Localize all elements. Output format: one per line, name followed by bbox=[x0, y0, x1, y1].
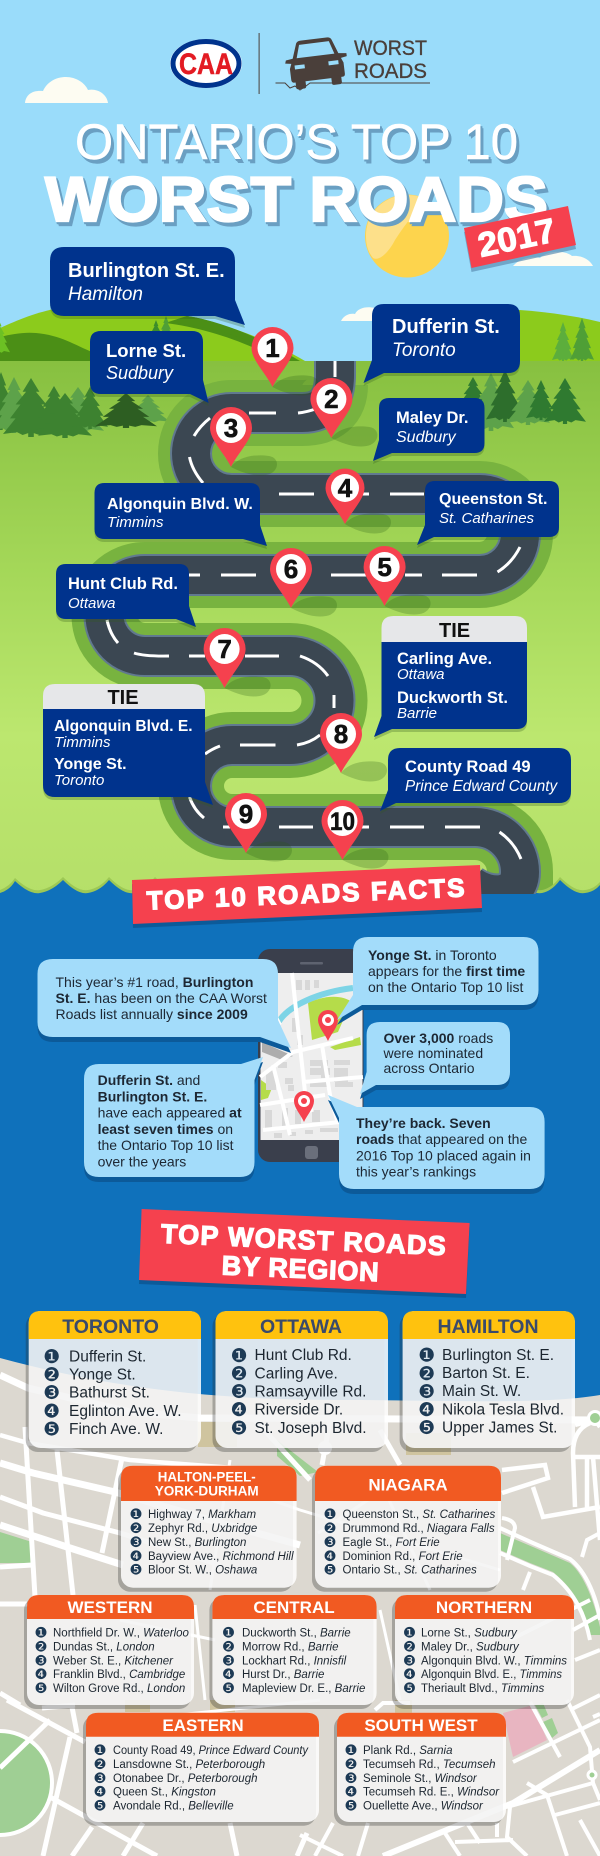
panel: Western bbox=[24, 1595, 194, 1709]
list: Halton-Peel-York-Durham roads: ❸ bbox=[130, 1535, 142, 1551]
list: Western roads bbox=[34, 1625, 190, 1697]
list: South West roads bbox=[344, 1743, 500, 1815]
list: Central roads bbox=[222, 1625, 365, 1697]
fact bubble: number one road bbox=[38, 959, 291, 1048]
list: Halton-Peel-York-Durham roads: Highway 7, Markham bbox=[148, 1509, 256, 1521]
logo: CAA: CAA bbox=[179, 48, 233, 81]
list: Ottawa roads: Ramsayville Rd. bbox=[254, 1384, 366, 1400]
list: Northern roads: ❹ bbox=[403, 1667, 416, 1683]
pin 6 with shadow: 6 bbox=[284, 554, 298, 584]
list: Halton-Peel-York-Durham roads: Zephyr Rd., Uxbridge bbox=[148, 1523, 257, 1535]
panel header: Hamilton: HAMILTON bbox=[437, 1316, 539, 1338]
list: Ottawa roads: Hunt Club Rd. bbox=[254, 1347, 352, 1364]
banner: top 10 roads facts: TOP 10 ROADS FACTS bbox=[146, 872, 465, 916]
panel: Hamilton bbox=[400, 1311, 575, 1452]
pin 2 with shadow: 2 bbox=[324, 384, 339, 414]
bubble: tie Algonquin Blvd. E. and Yonge St.: Algonquin Blvd. E. bbox=[54, 718, 193, 735]
panel header: South West bbox=[337, 1713, 506, 1737]
bubble: tie Carling Ave. and Duckworth St.: Ottawa bbox=[397, 666, 445, 683]
logo: Worst Roads car: WORST bbox=[354, 36, 427, 60]
list: Western roads: ❸ bbox=[34, 1653, 48, 1669]
pin 5 with shadow bbox=[364, 546, 431, 614]
pin 1 with shadow bbox=[252, 327, 318, 395]
list: Hamilton roads: ❹ bbox=[418, 1399, 435, 1421]
bubble: Queenston St.: St. Catharines bbox=[439, 510, 535, 527]
bubble: Maley Dr. bbox=[373, 398, 484, 461]
bubble: tie Algonquin Blvd. E. and Yonge St.: Yonge St. bbox=[54, 756, 127, 773]
bubble: Maley Dr.: Maley Dr. bbox=[396, 409, 468, 427]
bubble: tie Carling Ave. and Duckworth St.: Barrie bbox=[397, 705, 437, 722]
list: South West roads: Tecumseh Rd. E., Windsor bbox=[363, 1787, 500, 1799]
list: Niagara roads: Queenston St., St. Catharines bbox=[342, 1509, 496, 1521]
list: Niagara roads bbox=[324, 1507, 496, 1579]
list: South West roads: ❷ bbox=[344, 1757, 358, 1773]
bubble: County Road 49: Prince Edward County bbox=[405, 778, 559, 795]
pin 5 with shadow: 5 bbox=[377, 552, 392, 582]
pin 3 with shadow: 3 bbox=[224, 413, 238, 443]
fact bubble: over 3,000 roads: were nominated bbox=[382, 1045, 483, 1061]
list: Ottawa roads: Carling Ave. bbox=[254, 1365, 338, 1382]
fact bubble: they're back: roads that appeared on the bbox=[356, 1131, 527, 1147]
road bbox=[104, 361, 520, 894]
panel header: Niagara bbox=[315, 1466, 501, 1501]
panel: South West bbox=[334, 1713, 506, 1826]
bubble: Algonquin Blvd. W.: Algonquin Blvd. W. bbox=[107, 496, 253, 513]
list: Hamilton roads: Barton St. E. bbox=[442, 1365, 530, 1382]
list: Western roads: ❺ bbox=[34, 1681, 48, 1697]
list: Toronto roads: Dufferin St. bbox=[69, 1348, 146, 1366]
fact bubble: Dufferin and Burlington: Burlington St. E. bbox=[98, 1089, 207, 1105]
pin 9 with shadow bbox=[225, 793, 292, 861]
list: Toronto roads: ❹ bbox=[43, 1400, 60, 1422]
sun bbox=[365, 194, 449, 278]
list: Ottawa roads: ❸ bbox=[230, 1381, 248, 1403]
list: Eastern roads: ❹ bbox=[94, 1785, 106, 1801]
list: Northern roads: Maley Dr., Sudbury bbox=[421, 1641, 520, 1653]
panel header: Western bbox=[27, 1595, 194, 1619]
panel header: Central bbox=[212, 1595, 377, 1619]
fact bubble: Yonge St. bbox=[337, 937, 538, 1020]
list: Northern roads: ❸ bbox=[403, 1653, 416, 1669]
bubble: Algonquin Blvd. W.: Timmins bbox=[107, 514, 164, 531]
panel header: Ottawa: OTTAWA bbox=[260, 1316, 342, 1338]
list: Ottawa roads: ❺ bbox=[230, 1418, 248, 1440]
list: South West roads: ❶ bbox=[344, 1743, 358, 1759]
list: Western roads: ❷ bbox=[34, 1639, 48, 1655]
distant trees bbox=[0, 316, 594, 362]
list: Eastern roads: ❺ bbox=[94, 1799, 106, 1815]
phone map pin lower bbox=[294, 1091, 314, 1122]
list: Toronto roads: Finch Ave. W. bbox=[69, 1421, 163, 1438]
fact bubble: they're back bbox=[328, 1095, 545, 1189]
list: South West roads: ❸ bbox=[344, 1771, 358, 1787]
list: Central roads: Mapleview Dr. E., Barrie bbox=[242, 1683, 365, 1695]
list: Hamilton roads: Burlington St. E. bbox=[442, 1347, 554, 1364]
list: Northern roads: Lorne St., Sudbury bbox=[421, 1627, 518, 1639]
cloud: upper left bbox=[25, 77, 108, 103]
trees: left cluster bbox=[0, 372, 170, 438]
bubble: County Road 49 bbox=[380, 748, 571, 811]
fact bubble: Yonge St.: appears for the first time bbox=[368, 963, 525, 979]
bubble: Lorne St.: Lorne St. bbox=[106, 340, 186, 361]
pin 9 with shadow: 9 bbox=[239, 799, 253, 829]
fact bubble: over 3,000 roads: Over 3,000 roads bbox=[384, 1030, 493, 1046]
bubble: tie Algonquin Blvd. E. and Yonge St.: Toronto bbox=[54, 772, 104, 789]
list: Hamilton roads: Nikola Tesla Blvd. bbox=[442, 1401, 564, 1418]
list: Niagara roads: ❺ bbox=[324, 1563, 336, 1579]
bubble: Lorne St. bbox=[90, 331, 209, 403]
green field bbox=[0, 361, 600, 896]
list: Niagara roads: Drummond Rd., Niagara Falls bbox=[342, 1523, 495, 1535]
panel header: Ottawa bbox=[216, 1311, 388, 1339]
list: Halton-Peel-York-Durham roads: ❺ bbox=[130, 1563, 142, 1579]
list: Eastern roads: Otonabee Dr., Peterborough bbox=[113, 1773, 258, 1785]
list: Central roads: ❹ bbox=[222, 1667, 235, 1683]
bubble: Queenston St.: Queenston St. bbox=[439, 491, 547, 508]
fact bubble: Dufferin and Burlington: the Ontario Top 10 list bbox=[98, 1137, 234, 1153]
title: ONTARIO’S TOP 10 bbox=[75, 114, 518, 170]
panel header: Hamilton bbox=[403, 1311, 575, 1339]
list: Eastern roads: Avondale Rd., Belleville bbox=[113, 1801, 234, 1813]
list: Central roads: ❶ bbox=[222, 1625, 235, 1641]
bubble: tie Carling Ave. and Duckworth St.: Duckworth St. bbox=[397, 689, 508, 707]
panel header: Northern: NORTHERN bbox=[436, 1598, 532, 1617]
pin 3 with shadow bbox=[210, 407, 277, 475]
list: Northern roads: Algonquin Blvd. E., Timmins bbox=[421, 1669, 562, 1681]
title bbox=[45, 114, 548, 235]
list: Ottawa roads: St. Joseph Blvd. bbox=[254, 1420, 367, 1437]
phone map pin upper bbox=[318, 1010, 338, 1041]
road shoulder bbox=[104, 385, 520, 895]
list: Hamilton roads bbox=[418, 1344, 564, 1439]
bubble: Burlington St. E.: Hamilton bbox=[68, 284, 143, 305]
panel header: South West: SOUTH WEST bbox=[364, 1716, 478, 1735]
logo: CAA bbox=[170, 39, 242, 88]
list: Hamilton roads: ❺ bbox=[418, 1417, 435, 1439]
fact bubble: over 3,000 roads bbox=[360, 1022, 510, 1094]
fact bubble: Yonge St.: Yonge St. in Toronto bbox=[368, 947, 497, 963]
banner: top 10 roads facts bbox=[132, 865, 482, 928]
list: Eastern roads bbox=[94, 1743, 309, 1815]
pin 2 with shadow bbox=[310, 378, 377, 446]
list: Western roads: Weber St. E., Kitchener bbox=[53, 1655, 174, 1667]
fact bubble: number one road: Roads list annually since 2009 bbox=[56, 1006, 248, 1022]
fact bubble: they're back: 2016 Top 10 placed again in bbox=[356, 1148, 531, 1164]
fact bubble: Dufferin and Burlington bbox=[84, 1057, 263, 1177]
panel header: Niagara: NIAGARA bbox=[368, 1476, 448, 1495]
list: Toronto roads: ❺ bbox=[43, 1418, 60, 1440]
panel: Eastern bbox=[83, 1713, 319, 1826]
cloud: small bbox=[341, 307, 375, 321]
list: Eastern roads: ❷ bbox=[94, 1757, 106, 1773]
fact bubble: number one road: St. E. has been on the CAA Worst bbox=[56, 990, 267, 1006]
bubble: tie Carling Ave. and Duckworth St. bbox=[374, 616, 527, 737]
list: Western roads: Northfield Dr. W., Waterloo bbox=[53, 1627, 190, 1639]
list: Toronto roads: Eglinton Ave. W. bbox=[69, 1403, 182, 1420]
list: Ottawa roads: ❷ bbox=[230, 1363, 248, 1385]
hills bbox=[0, 306, 600, 361]
city map background bbox=[0, 1358, 600, 1856]
bubble: Maley Dr.: Sudbury bbox=[396, 429, 457, 446]
list: Northern roads: ❺ bbox=[403, 1681, 416, 1697]
panel header: Western: WESTERN bbox=[68, 1598, 152, 1617]
panel header: Halton-Peel-York-Durham: HALTON-PEEL- bbox=[158, 1469, 256, 1485]
logo divider bbox=[259, 33, 260, 94]
pin 4 with shadow bbox=[326, 468, 391, 533]
water bbox=[0, 877, 600, 1420]
list: South West roads: Plank Rd., Sarnia bbox=[363, 1745, 452, 1757]
bubble: tie Algonquin Blvd. E. and Yonge St. bbox=[43, 684, 213, 805]
list: Hamilton roads: ❷ bbox=[418, 1363, 435, 1385]
list: Ottawa roads: ❶ bbox=[230, 1345, 248, 1367]
road center dashes bbox=[107, 361, 521, 859]
list: Western roads: ❹ bbox=[34, 1667, 48, 1683]
list: South West roads: Tecumseh Rd., Tecumseh bbox=[363, 1759, 496, 1771]
list: Eastern roads: County Road 49, Prince Edward County bbox=[113, 1745, 309, 1757]
list: Halton-Peel-York-Durham roads: Bloor St. W., Oshawa bbox=[148, 1565, 257, 1577]
pin 10 with shadow bbox=[322, 800, 388, 868]
bubble: Hunt Club Rd.: Ottawa bbox=[68, 595, 116, 612]
list: Ottawa roads: ❹ bbox=[230, 1399, 248, 1421]
bubble: County Road 49: County Road 49 bbox=[405, 758, 531, 776]
fact bubble: Dufferin and Burlington: over the years bbox=[98, 1154, 186, 1170]
list: Western roads: Dundas St., London bbox=[53, 1641, 155, 1653]
panel: Central bbox=[209, 1595, 377, 1709]
bubble: tie Carling Ave. and Duckworth St.: Carling Ave. bbox=[397, 650, 492, 668]
pin 6 with shadow bbox=[270, 548, 337, 616]
list: Niagara roads: Dominion Rd., Fort Erie bbox=[342, 1551, 463, 1563]
list: Central roads: ❷ bbox=[222, 1639, 235, 1655]
bubble: Hunt Club Rd. bbox=[56, 564, 196, 627]
list: Hamilton roads: ❶ bbox=[418, 1344, 435, 1366]
bubble: Queenston St. bbox=[417, 481, 559, 545]
bubble: Lorne St.: Sudbury bbox=[106, 363, 174, 383]
list: South West roads: ❹ bbox=[344, 1785, 358, 1801]
list: Toronto roads: Yonge St. bbox=[69, 1366, 136, 1384]
list: Niagara roads: ❷ bbox=[324, 1521, 336, 1537]
fact bubble: number one road: This year’s #1 road, Burlington bbox=[56, 974, 253, 990]
list: South West roads: Ouellette Ave., Windsor bbox=[363, 1801, 484, 1813]
pin 7 with shadow: 7 bbox=[217, 634, 232, 664]
fact bubble: they're back: this year’s rankings bbox=[356, 1164, 476, 1180]
list: Central roads: Hurst Dr., Barrie bbox=[242, 1669, 324, 1681]
title: WORST ROADS bbox=[45, 165, 548, 235]
list: Eastern roads: Queen St., Kingston bbox=[113, 1787, 216, 1799]
trees: right cluster bbox=[456, 370, 586, 431]
list: Ottawa roads: Riverside Dr. bbox=[254, 1402, 343, 1419]
pin 4 with shadow: 4 bbox=[338, 473, 353, 503]
list: South West roads: ❺ bbox=[344, 1799, 358, 1815]
list: South West roads: Seminole St., Windsor bbox=[363, 1773, 478, 1785]
panel header: Northern bbox=[395, 1595, 574, 1619]
bubble: Algonquin Blvd. W. bbox=[94, 483, 267, 546]
list: Northern roads bbox=[403, 1625, 567, 1697]
year banner bbox=[464, 206, 576, 272]
list: Niagara roads: ❹ bbox=[324, 1549, 336, 1565]
logo: Worst Roads car: ROADS bbox=[354, 59, 427, 83]
list: Eastern roads: Lansdowne St., Peterborough bbox=[113, 1759, 265, 1771]
bubble: Hunt Club Rd.: Hunt Club Rd. bbox=[68, 575, 178, 593]
list: Niagara roads: ❸ bbox=[324, 1535, 336, 1551]
list: Eastern roads: ❸ bbox=[94, 1771, 106, 1787]
bubble: Burlington St. E. bbox=[50, 247, 245, 325]
phone with map bbox=[258, 949, 364, 1162]
panel header: Halton-Peel-York-Durham bbox=[121, 1466, 297, 1501]
panel header: Toronto bbox=[29, 1311, 201, 1339]
list: Toronto roads: ❷ bbox=[43, 1364, 60, 1386]
list: Central roads: Lockhart Rd., Innisfil bbox=[242, 1655, 347, 1667]
cloud: right bbox=[513, 252, 593, 266]
list: Niagara roads: Eagle St., Fort Erie bbox=[342, 1537, 440, 1549]
fact bubble: they're back: They’re back. Seven bbox=[356, 1115, 491, 1131]
bubble: Dufferin St.: Dufferin St. bbox=[392, 316, 500, 338]
list: Halton-Peel-York-Durham roads: ❶ bbox=[130, 1507, 142, 1523]
fact bubble: Dufferin and Burlington: have each appeared at bbox=[98, 1105, 242, 1121]
list: Halton-Peel-York-Durham roads: ❷ bbox=[130, 1521, 142, 1537]
panel header: Toronto: TORONTO bbox=[62, 1316, 159, 1338]
list: Northern roads: Theriault Blvd., Timmins bbox=[421, 1683, 544, 1695]
list: Halton-Peel-York-Durham roads: New St., Burlington bbox=[148, 1537, 246, 1549]
list: Central roads: Duckworth St., Barrie bbox=[242, 1627, 351, 1639]
list: Hamilton roads: Upper James St. bbox=[442, 1420, 557, 1436]
panel header: Eastern: EASTERN bbox=[162, 1716, 244, 1735]
sky background bbox=[0, 0, 600, 400]
list: Niagara roads: Ontario St., St. Catharines bbox=[342, 1565, 477, 1577]
banner: top worst roads by region bbox=[139, 1209, 470, 1298]
list: Northern roads: ❷ bbox=[403, 1639, 416, 1655]
fact bubble: over 3,000 roads: across Ontario bbox=[384, 1060, 475, 1076]
list: Western roads: Franklin Blvd., Cambridge bbox=[53, 1669, 185, 1681]
list: Eastern roads: ❶ bbox=[94, 1743, 106, 1759]
banner: top worst roads by region: BY REGION bbox=[221, 1250, 379, 1287]
list: Western roads: Wilton Grove Rd., London bbox=[53, 1683, 185, 1695]
panel: Ottawa bbox=[212, 1311, 388, 1452]
list: Halton-Peel-York-Durham roads: ❹ bbox=[130, 1549, 142, 1565]
list: Northern roads: Algonquin Blvd. W., Timmins bbox=[421, 1655, 567, 1667]
list: Western roads: ❶ bbox=[34, 1625, 48, 1641]
bubble: Dufferin St.: Toronto bbox=[392, 340, 456, 361]
bubble: Dufferin St. bbox=[364, 304, 520, 383]
panel header: Central: CENTRAL bbox=[253, 1598, 335, 1617]
pin 1 with shadow: 1 bbox=[265, 333, 280, 363]
list: Toronto roads: Bathurst St. bbox=[69, 1385, 150, 1402]
panel: Halton-Peel-York-Durham bbox=[118, 1466, 297, 1592]
pin 8 with shadow bbox=[320, 713, 387, 781]
list: Toronto roads: ❸ bbox=[43, 1382, 60, 1404]
year banner: 2017 bbox=[475, 212, 559, 265]
pin 10 with shadow: 10 bbox=[330, 808, 355, 836]
panel header: Eastern bbox=[86, 1713, 319, 1737]
list: Halton-Peel-York-Durham roads bbox=[130, 1507, 294, 1579]
pin 8 with shadow: 8 bbox=[334, 719, 348, 749]
panel: Niagara bbox=[312, 1466, 501, 1592]
panel: Toronto bbox=[26, 1311, 201, 1452]
pin 7 with shadow bbox=[204, 628, 271, 696]
banner: top worst roads by region: TOP WORST ROADS bbox=[160, 1219, 446, 1261]
panel header: Halton-Peel-York-Durham: YORK-DURHAM bbox=[155, 1483, 259, 1499]
list: Hamilton roads: ❸ bbox=[418, 1381, 435, 1403]
list: Halton-Peel-York-Durham roads: Bayview Ave., Richmond Hill bbox=[148, 1551, 294, 1563]
bubble: tie Algonquin Blvd. E. and Yonge St.: Timmins bbox=[54, 734, 111, 751]
bubble: tie Carling Ave. and Duckworth St.: TIE bbox=[439, 620, 470, 642]
list: Central roads: ❸ bbox=[222, 1653, 235, 1669]
bubble: Burlington St. E.: Burlington St. E. bbox=[68, 260, 225, 282]
bubble: tie Algonquin Blvd. E. and Yonge St.: TIE bbox=[107, 687, 139, 709]
list: Ottawa roads bbox=[230, 1345, 367, 1440]
fact bubble: Dufferin and Burlington: least seven times on bbox=[98, 1121, 233, 1137]
list: Toronto roads bbox=[43, 1346, 182, 1440]
panel: Northern bbox=[392, 1595, 574, 1709]
fact bubble: Dufferin and Burlington: Dufferin St. and bbox=[98, 1072, 200, 1088]
list: Niagara roads: ❶ bbox=[324, 1507, 336, 1523]
logo: Worst Roads car bbox=[276, 35, 430, 90]
list: Northern roads: ❶ bbox=[403, 1625, 416, 1641]
list: Central roads: Morrow Rd., Barrie bbox=[242, 1641, 339, 1653]
fact bubble: Yonge St.: on the Ontario Top 10 list bbox=[368, 979, 524, 995]
list: Central roads: ❺ bbox=[222, 1681, 235, 1697]
list: Toronto roads: ❶ bbox=[43, 1346, 60, 1368]
list: Hamilton roads: Main St. W. bbox=[442, 1383, 521, 1400]
